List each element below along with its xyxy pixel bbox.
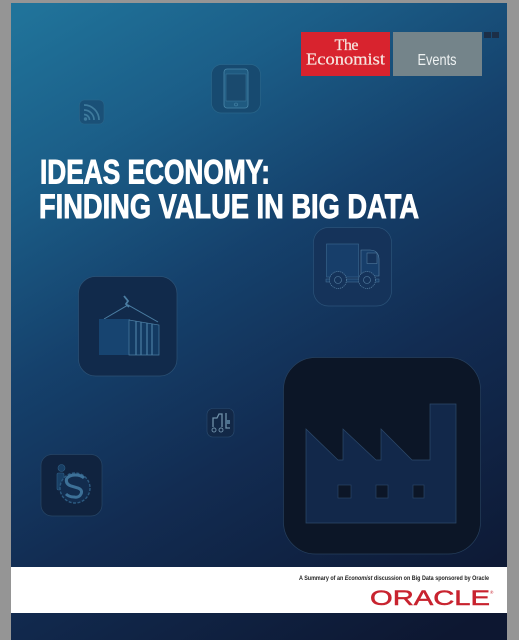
logo: The Economist	[301, 32, 390, 76]
icon: factory	[284, 358, 480, 554]
icon: shipping container	[78, 276, 177, 376]
sponsor line: A Summary of an Economist discussion on Big Data sponsored by Oracle	[299, 575, 489, 582]
title: IDEAS ECONOMY:	[40, 154, 270, 192]
title	[39, 154, 419, 226]
icon: delivery truck	[314, 228, 392, 306]
small logo squares	[484, 32, 499, 38]
logo: Oracle: ORACLE	[370, 587, 490, 610]
logo: The Economist: The	[334, 37, 358, 54]
icon: phone	[212, 64, 260, 113]
logo: Oracle: ®	[490, 589, 494, 595]
icon: RSS feed	[80, 100, 104, 124]
logo: Events: Events	[418, 52, 456, 69]
title: FINDING VALUE IN BIG DATA	[39, 188, 419, 226]
icon: person with dollar	[41, 454, 102, 516]
logo: The Economist: Economist	[306, 50, 385, 68]
logo: Oracle	[370, 587, 494, 610]
logo: Events	[393, 32, 482, 76]
icon: forklift	[207, 408, 234, 437]
white sponsor band	[11, 567, 507, 613]
